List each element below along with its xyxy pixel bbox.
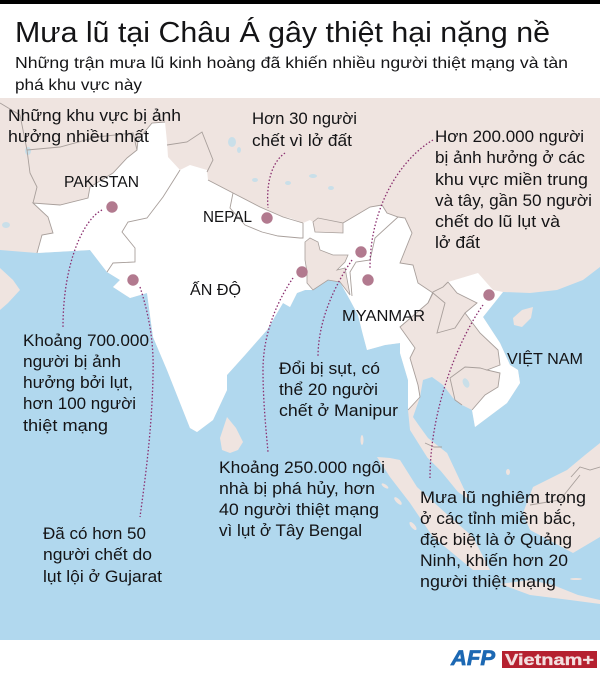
callout: Nepal xyxy=(252,110,357,150)
mainland Asia land mass xyxy=(0,98,600,490)
map of South and Southeast Asia xyxy=(0,98,600,640)
small islands and lakes xyxy=(2,137,582,580)
callout: West Bengal: 40 người thiệt mạng xyxy=(219,501,379,519)
callout: Nepal: Hơn 30 người xyxy=(252,110,357,128)
subtitle: phá khu vực này xyxy=(15,77,142,94)
callout: Pakistan: người bị ảnh xyxy=(23,353,121,371)
callout: Myanmar xyxy=(435,128,592,252)
callout: Myanmar: khu vực miền trung xyxy=(435,171,588,189)
callout: Pakistan: thiệt mạng xyxy=(23,417,108,435)
callout: Manipur xyxy=(279,360,399,420)
callout: Pakistan: hơn 100 người xyxy=(23,395,136,413)
callout: Nepal: chết vì lở đất xyxy=(252,132,352,150)
callout: Manipur: chết ở Manipur xyxy=(279,402,399,420)
callout: Myanmar: và tây, gần 50 người xyxy=(435,192,592,210)
country labels xyxy=(64,174,583,368)
callout: West Bengal xyxy=(219,459,385,540)
dotted leader lines xyxy=(63,140,483,517)
callout: Vietnam: người thiệt mạng xyxy=(420,573,556,591)
legend heading: most affected areas xyxy=(8,107,181,146)
Vietnam xyxy=(448,273,520,427)
callout: West Bengal: vì lụt ở Tây Bengal xyxy=(219,522,362,540)
callout: Vietnam: ở các tỉnh miền bắc, xyxy=(420,509,576,528)
callout: Myanmar: lở đất xyxy=(435,234,480,252)
callout: West Bengal: Khoảng 250.000 ngôi xyxy=(219,459,385,477)
country labels: MYANMAR xyxy=(342,308,425,325)
callout: Myanmar: chết do lũ lụt và xyxy=(435,213,561,231)
callout: West Bengal: nhà bị phá hủy, hơn xyxy=(219,480,375,498)
Hainan xyxy=(513,307,533,327)
callout: Vietnam: Mưa lũ nghiêm trọng xyxy=(420,489,586,507)
callout: Pakistan xyxy=(23,332,149,435)
legend heading: most affected areas: Những khu vực bị ảnh xyxy=(8,107,181,125)
callout: Manipur: thể 20 người xyxy=(279,381,378,399)
callout: Myanmar: bị ảnh hưởng ở các xyxy=(435,149,585,167)
callout: Gujarat: Đã có hơn 50 xyxy=(43,525,146,543)
logo: AFP: AFP xyxy=(450,647,496,670)
logo: Vietnam+: Vietnam+ xyxy=(505,652,594,669)
Malay peninsula xyxy=(427,440,470,500)
callout: Gujarat xyxy=(43,525,162,586)
Bhutan xyxy=(313,218,343,233)
callout: Gujarat: người chết do xyxy=(43,546,152,564)
country labels: NEPAL xyxy=(203,209,252,226)
subtitle xyxy=(15,55,568,94)
callout: Pakistan: Khoảng 700.000 xyxy=(23,332,149,350)
country labels: VIỆT NAM xyxy=(507,349,583,368)
callout: Gujarat: lụt lội ở Gujarat xyxy=(43,568,162,586)
callout: Myanmar: Hơn 200.000 người xyxy=(435,128,584,146)
country labels: PAKISTAN xyxy=(64,174,139,191)
subtitle: Những trận mưa lũ kinh hoàng đã khiến nhiều người thiệt mạng và tàn xyxy=(15,55,568,72)
Borneo xyxy=(523,443,600,553)
Sumatra xyxy=(377,457,490,570)
callout: Vietnam: Ninh, khiến hơn 20 xyxy=(420,552,568,570)
legend heading: most affected areas: hưởng nhiều nhất xyxy=(8,128,149,146)
affected location markers xyxy=(106,201,495,301)
highlighted countries: Pakistan, India, Nepal, Myanmar xyxy=(33,122,433,432)
Sri Lanka xyxy=(220,417,243,453)
country labels: ẤN ĐỘ xyxy=(190,280,241,299)
Bangladesh xyxy=(305,238,350,295)
callout: Manipur: Đổi bị sụt, có xyxy=(279,360,380,378)
Arabian peninsula xyxy=(0,268,20,310)
callout: Vietnam xyxy=(420,489,586,591)
callout: Vietnam: đặc biệt là ở Quảng xyxy=(420,531,572,549)
title: Mưa lũ tại Châu Á gây thiệt hại nặng nề xyxy=(15,16,550,49)
callout: Pakistan: hưởng bởi lụt, xyxy=(23,374,133,392)
Java xyxy=(500,580,600,604)
